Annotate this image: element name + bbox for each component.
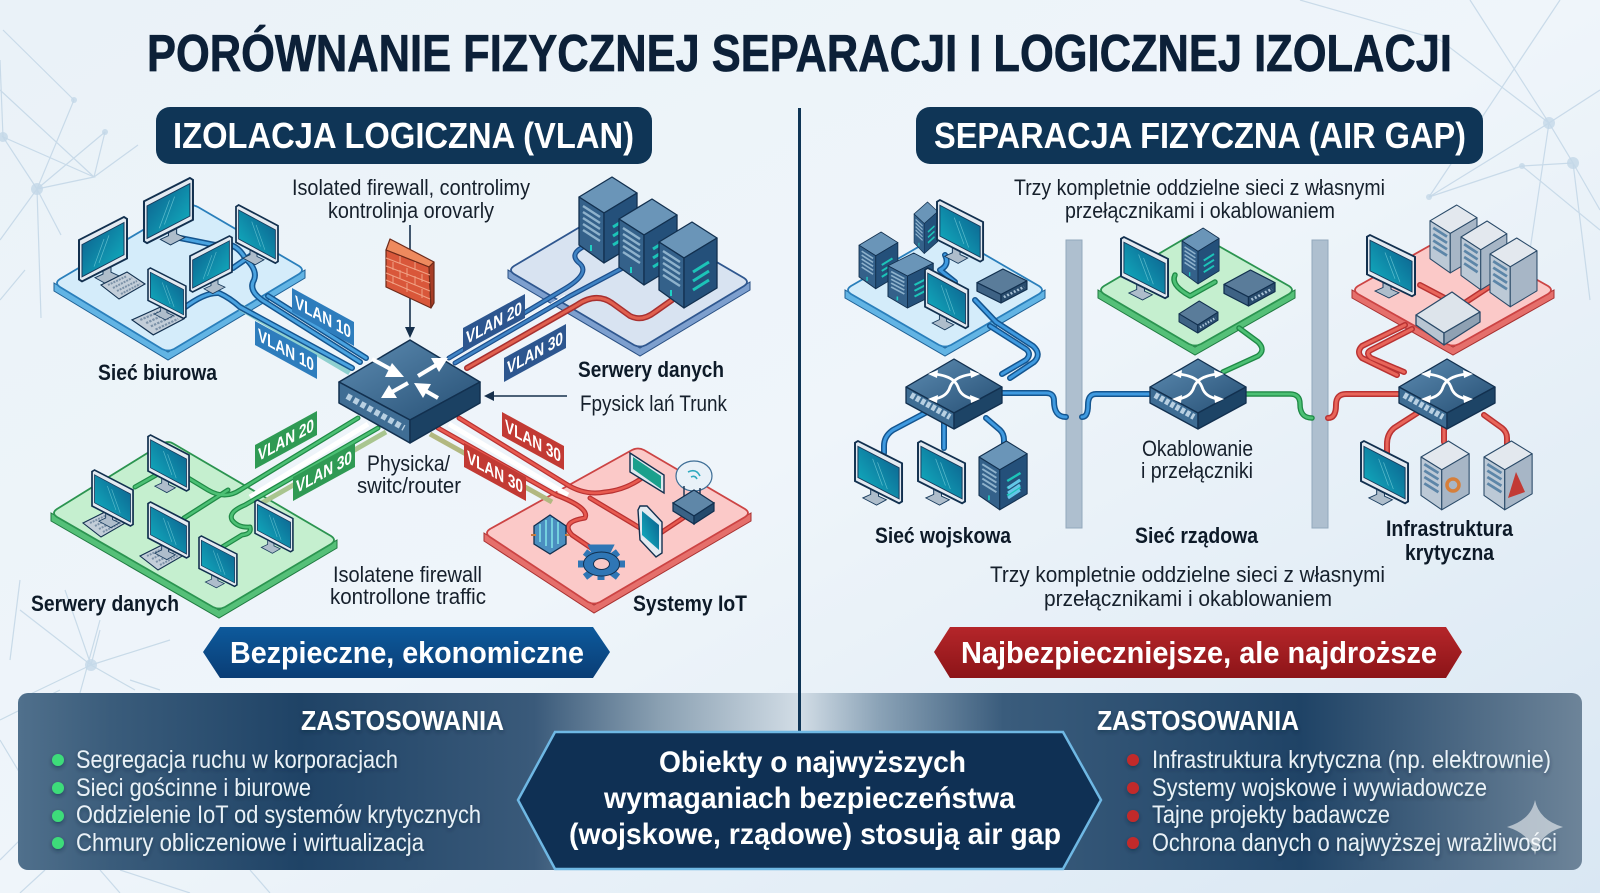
heading: applications left: ZASTOSOWANIA (301, 705, 504, 736)
platform: data servers (508, 206, 750, 356)
description upper: Trzy kompletnie oddzielne sieci z własnymi (1014, 175, 1385, 200)
label: critical infrastructure: krytyczna (1405, 540, 1495, 565)
icon: robot module (531, 515, 569, 554)
applications: left list (52, 705, 504, 857)
switch arrows (372, 358, 448, 398)
icon: tablet (630, 453, 664, 493)
description upper (1014, 175, 1385, 223)
annotation: isolated traffic (330, 562, 486, 609)
platform: green network (51, 442, 337, 618)
tag: VLAN 10 lower: VLAN 10 (258, 326, 314, 376)
icon: sparkle watermark (1507, 800, 1563, 855)
central physical switch (339, 340, 480, 443)
label: military network: Sieć wojskowa (875, 523, 1012, 548)
annotation: trunk with arrow (484, 391, 728, 416)
bottom applications panel background (18, 693, 1582, 870)
annotation: cabling and switches: i przełączniki (1141, 458, 1253, 483)
annotation: trunk with arrow: Fpysick lań Trunk (580, 391, 728, 416)
tag: VLAN 30 red upper (502, 412, 564, 470)
annotation: cabling and switches (1141, 436, 1253, 483)
devices: government network top (1121, 228, 1275, 333)
tag: VLAN 30 red upper: VLAN 30 (505, 417, 561, 467)
cables: VLAN trunks and links (135, 238, 686, 552)
icon: firewall (386, 239, 434, 308)
arrow: firewall to switch (405, 225, 415, 338)
heading: physical separation (916, 107, 1483, 164)
tag: VLAN 10 upper (292, 288, 354, 346)
data servers (579, 177, 717, 308)
bullet texts: Chmury obliczeniowe i wirtualizacja (76, 829, 424, 857)
platform: critical infrastructure (1352, 234, 1554, 355)
bullet texts: Oddzielenie IoT od systemów krytycznych (76, 801, 481, 829)
switch: critical (1399, 359, 1495, 429)
bullet texts (76, 746, 481, 857)
banner: secure and economical: Bezpieczne, ekonomiczne (230, 635, 584, 670)
tag: VLAN 30 green: VLAN 30 (296, 448, 352, 498)
annotation: isolated firewall (292, 175, 530, 223)
switch: military (906, 359, 1002, 429)
tag: VLAN 30 red lower: VLAN 30 (467, 448, 523, 498)
right column: physical separation (845, 107, 1554, 678)
icon: phone (638, 506, 662, 557)
annotation: isolated firewall: kontrolinja orovarly (328, 198, 494, 223)
annotation: physical switch (357, 451, 461, 498)
annotation: physical switch: Physicka/ (367, 451, 451, 476)
air gap pillars (1066, 240, 1328, 528)
central divider (798, 108, 801, 733)
tag: VLAN 30 servers (504, 324, 566, 382)
bullet texts red list: Infrastruktura krytyczna (np. elektrownie) (1152, 746, 1551, 774)
cables: green network (1174, 275, 1312, 418)
devices: military network bottom (855, 441, 1027, 510)
description upper: przełącznikami i okablowaniem (1065, 198, 1335, 223)
label: data servers right: Serwery danych (578, 357, 724, 382)
description lower: przełącznikami i okablowaniem (1044, 586, 1332, 611)
callout: central conclusion: wymaganiach bezpieczeństwa (603, 782, 1015, 815)
green network devices (83, 435, 293, 588)
platform: military network (845, 234, 1045, 356)
tag: VLAN 30 servers: VLAN 30 (507, 329, 563, 379)
annotation: physical switch: switc/router (357, 473, 461, 498)
tag: VLAN 10 lower (255, 321, 317, 379)
IoT devices (531, 453, 714, 580)
tag: VLAN 20 green: VLAN 20 (258, 416, 314, 466)
description lower (990, 562, 1385, 611)
heading: logical isolation (156, 107, 652, 164)
applications: right list (1097, 705, 1557, 857)
left column: logical isolation (31, 107, 751, 678)
bullet texts red list: Systemy wojskowe i wywiadowcze (1152, 774, 1487, 802)
tag: VLAN 20 servers (463, 294, 525, 352)
bullet texts red list (1152, 746, 1557, 857)
label: office network: Sieć biurowa (98, 360, 218, 385)
tag: VLAN 10 upper: VLAN 10 (295, 293, 351, 343)
heading: logical isolation: IZOLACJA LOGICZNA (VLAN) (173, 115, 634, 156)
label: government network: Sieć rządowa (1135, 523, 1259, 548)
callout: central conclusion: Obiekty o najwyższych (659, 746, 966, 779)
label: IoT systems: Systemy IoT (633, 591, 747, 616)
heading: applications right: ZASTOSOWANIA (1097, 705, 1299, 736)
icon: wifi cloud (676, 461, 712, 491)
platform: government network (1098, 234, 1295, 355)
annotation: cabling and switches: Okablowanie (1142, 436, 1253, 461)
tag: VLAN 20 green (255, 411, 317, 469)
tag: VLAN 20 servers: VLAN 20 (466, 299, 522, 349)
tag: VLAN 30 red lower (464, 443, 526, 501)
devices: military network top (859, 200, 1027, 330)
description lower: Trzy kompletnie oddzielne sieci z własnymi (990, 562, 1385, 587)
annotation: isolated firewall: Isolated firewall, controlimy (292, 175, 530, 200)
VLAN tags (255, 288, 566, 501)
annotation: isolated traffic: Isolatene firewall (333, 562, 482, 587)
callout: central conclusion: (wojskowe, rządowe) stosują air gap (569, 818, 1061, 851)
office devices (79, 178, 278, 335)
label: data servers lower: Serwery danych (31, 591, 179, 616)
icon: gear (578, 548, 625, 580)
devices: critical infrastructure top (1367, 205, 1537, 345)
tag: VLAN 30 green (293, 443, 355, 501)
banner: safest but most expensive: Najbezpieczniejsze, ale najdroższe (961, 635, 1437, 670)
devices: critical infrastructure bottom (1361, 441, 1532, 510)
banner: safest but most expensive (934, 627, 1462, 678)
bullet markers (52, 754, 64, 849)
banner: secure and economical (203, 627, 610, 678)
heading: physical separation: SEPARACJA FIZYCZNA (AIR GAP) (934, 115, 1466, 156)
cables: red network (1328, 283, 1507, 453)
platform: IoT systems (484, 448, 751, 613)
switch: government (1150, 359, 1246, 429)
label: critical infrastructure: Infrastruktura (1386, 516, 1514, 541)
cables: blue network (884, 255, 1149, 453)
platform: office network (54, 205, 305, 360)
bullet markers red (1127, 754, 1139, 849)
bullet texts: Segregacja ruchu w korporacjach (76, 746, 398, 774)
callout: central conclusion (518, 732, 1101, 869)
bullet texts red list: Tajne projekty badawcze (1152, 801, 1390, 829)
label: critical infrastructure (1386, 516, 1514, 565)
bullet texts: Sieci gościnne i biurowe (76, 774, 311, 802)
annotation: isolated traffic: kontrollone traffic (330, 584, 486, 609)
icon: router (673, 486, 714, 524)
